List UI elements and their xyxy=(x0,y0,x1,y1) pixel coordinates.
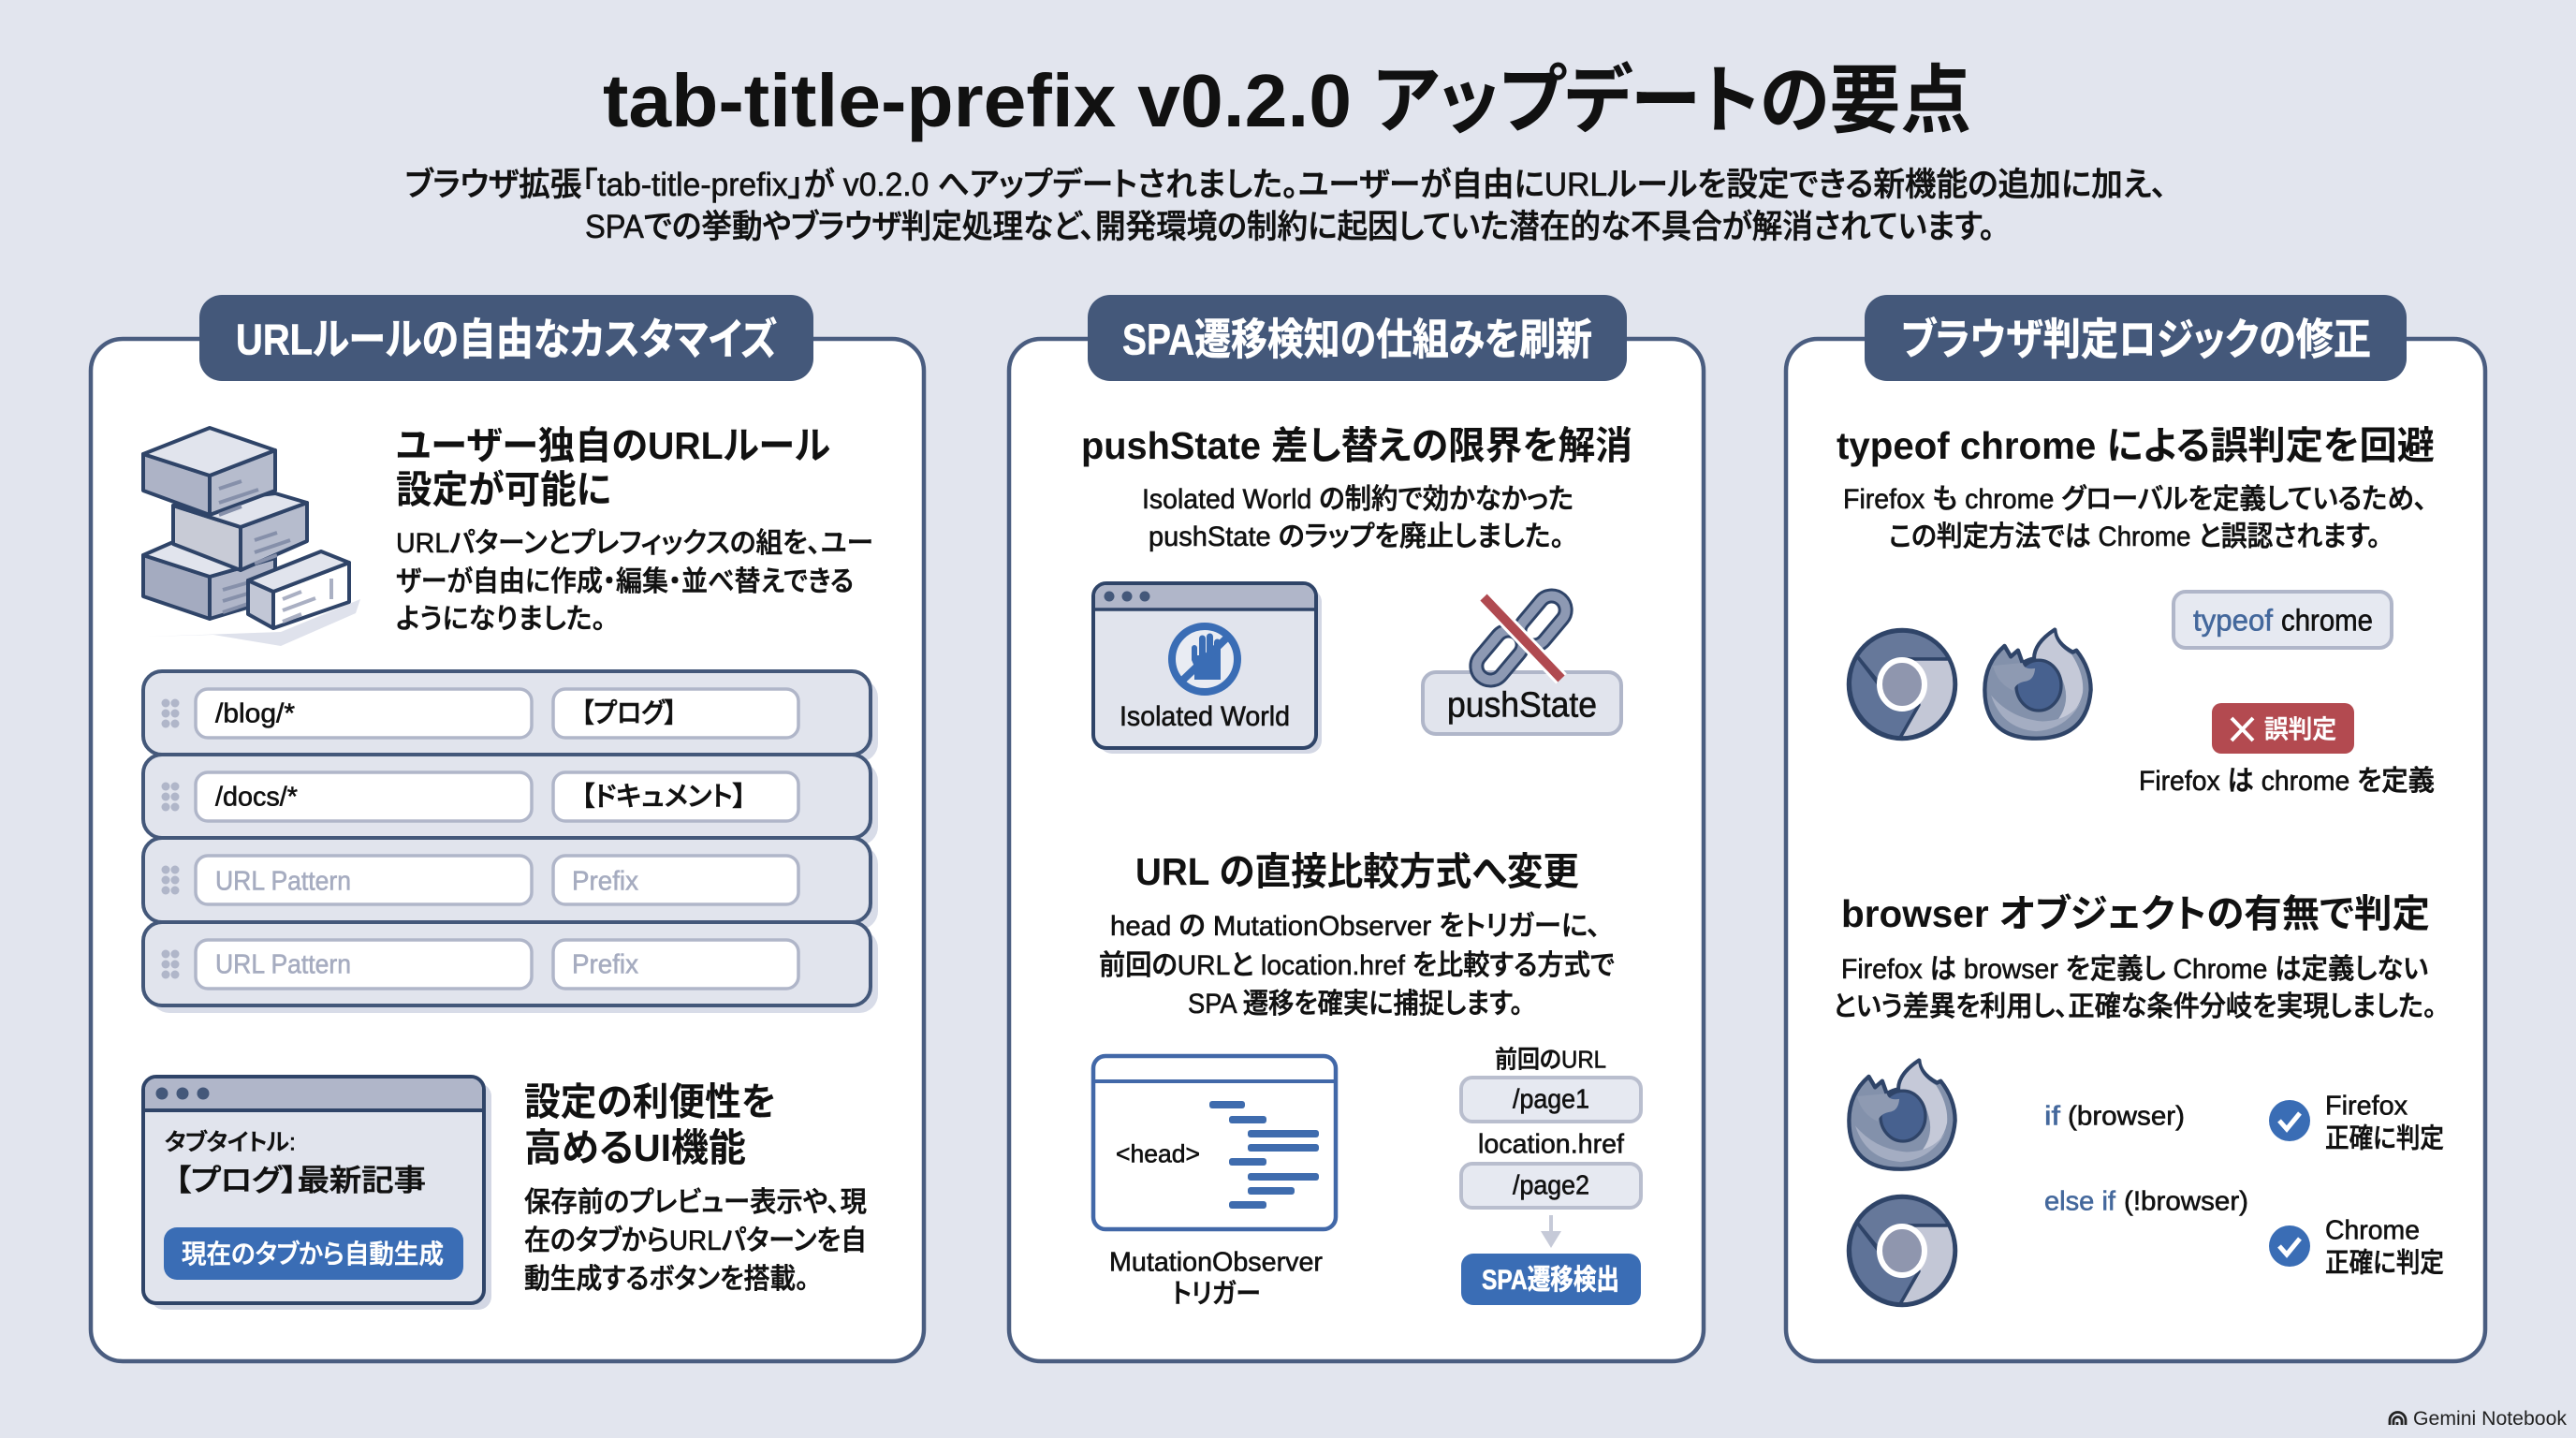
button: SPA遷移検出: SPA遷移検出 xyxy=(1482,1265,1619,1296)
heading: 設定の利便性 xyxy=(524,1080,776,1169)
badge: 誤判定: 誤判定 xyxy=(2264,715,2336,743)
diagram: URL comparison flow: 前回のURL xyxy=(1495,1045,1606,1073)
code: else if (!browser): else if xyxy=(2044,1187,2116,1217)
result: Firefox 正確に判定 xyxy=(2269,1092,2444,1153)
panel frame xyxy=(91,339,924,1361)
heading: typeof chrome: typeof chrome による誤判定を回避 xyxy=(1837,424,2435,467)
rule row 3 xyxy=(143,838,878,930)
code chip: typeof chrome: typeof xyxy=(2193,603,2273,637)
subtitle: ブラウザ拡張「tab-title-prefix」が v0.2.0 へアップデートされました。ユーザーが自由にURLルールを設定できる新機能の追加に加え、 xyxy=(405,167,2167,203)
body text: Firefox も chrome xyxy=(1843,484,2427,552)
body text: URLパターン: URLパターンとプレフィックスの組を、ユー xyxy=(396,528,873,559)
icon: pushState broken chain xyxy=(1423,590,1621,734)
body text: Firefox は browser: という差異を利用し、正確な条件分岐を実現しました。 xyxy=(1833,991,2437,1022)
heading: 設定の利便性: 設定の利便性を xyxy=(524,1080,776,1123)
watermark: Gemini Notebook: Gemini Notebook xyxy=(2413,1408,2568,1430)
icon: Isolated World window: Isolated World xyxy=(1120,701,1290,732)
rule row 3: URL Pattern xyxy=(215,867,351,897)
rule row 1 xyxy=(143,671,878,762)
result: Firefox 正確に判定: Firefox xyxy=(2325,1092,2408,1122)
heading: URL の直接比較方式へ変更: URL の直接比較方式へ変更 xyxy=(1135,850,1579,893)
heading: ユーザー独自のURLルール設定: ユーザー独自のURLルール xyxy=(396,424,830,467)
panel: URLルールの自由なカスタマイズ xyxy=(91,295,924,1361)
body text: Firefox は browser: Firefox は browser を定義し Chrome は定義しない xyxy=(1841,954,2428,985)
code: else if (!browser) xyxy=(2044,1187,2248,1217)
diagram: URL comparison flow: location.href xyxy=(1478,1129,1625,1159)
panel: ブラウザ判定ロジックの修正 xyxy=(1786,295,2485,1361)
body text: Isolated World: Isolated World の制約で効かなかった xyxy=(1142,484,1573,515)
panel header xyxy=(1088,295,1627,381)
subtitle: SPAでの挙動やブラウザ判定処理など、開発環境の制約に起因していた潜在的な不具合が解消されています。 xyxy=(585,209,1995,245)
body text: Isolated World: pushState のラップを廃止しました。 xyxy=(1149,521,1564,552)
diagram: MutationObserver head window: <head> xyxy=(1116,1140,1200,1168)
rule row 4 xyxy=(143,922,878,1013)
title: tab-title-prefix v0.2.0 xyxy=(603,59,1352,142)
icon: pushState broken chain: pushState xyxy=(1447,685,1597,725)
diagram: MutationObserver head window xyxy=(1093,1056,1336,1229)
panel: SPA遷移検知の仕組みを刷新 xyxy=(1009,295,1704,1361)
body text: Isolated World xyxy=(1142,484,1573,552)
body text: Firefox も chrome: Firefox も chrome グローバルを定義しているため、 xyxy=(1843,484,2427,515)
body text: MutationObserver: head の MutationObserver をトリガーに、 xyxy=(1110,911,1601,942)
code: if (browser): (browser) xyxy=(2068,1101,2185,1131)
body text: プレビュー表示 xyxy=(524,1187,867,1295)
code chip: typeof chrome xyxy=(2174,592,2392,648)
rule row 1: /blog/* xyxy=(215,698,295,728)
body text: MutationObserver: 前回のURLと location.href を比較する方式で xyxy=(1099,950,1615,981)
code: else if (!browser): (!browser) xyxy=(2124,1187,2248,1217)
title: アップデートの要点 xyxy=(1373,59,1971,142)
browser preview window: タブタイトル: xyxy=(165,1129,296,1155)
code: if (browser): if xyxy=(2044,1101,2061,1131)
caption: MutationObserver トリガー xyxy=(1109,1247,1323,1309)
subtitle xyxy=(405,167,2167,245)
diagram: URL comparison flow xyxy=(1461,1045,1641,1305)
caption: MutationObserver トリガー: MutationObserver xyxy=(1109,1247,1323,1277)
badge: 誤判定 xyxy=(2212,703,2354,754)
panel header xyxy=(1865,295,2407,381)
result: Chrome 正確に判定: 正確に判定 xyxy=(2325,1247,2444,1279)
button: SPA遷移検出 xyxy=(1461,1254,1641,1305)
rule row 2: 【ドキュメント】 xyxy=(581,783,746,813)
arrow: down xyxy=(1541,1215,1561,1248)
body text: プレビュー表示: 在のタブからURLパターンを自 xyxy=(524,1225,867,1256)
body text: URLパターン xyxy=(396,528,873,635)
icon: Isolated World window xyxy=(1093,583,1322,754)
rule row 1: 【プログ】 xyxy=(581,698,677,728)
body text: URLパターン: ようになりました。 xyxy=(396,604,606,635)
icon: stacked boxes xyxy=(143,428,360,646)
panel header: URLルールの自由なカスタマイズ xyxy=(236,315,777,363)
rule row 2 xyxy=(143,755,878,845)
icon: Firefox xyxy=(1984,630,2091,739)
rule row 2: /docs/* xyxy=(215,783,298,813)
caption: Firefox は chrome を定義: Firefox は chrome を定義 xyxy=(2139,766,2435,797)
body text: Firefox も chrome: この判定方法では Chrome と誤認されます。 xyxy=(1889,521,2380,552)
rule row 3: Prefix xyxy=(572,867,638,897)
caption: MutationObserver トリガー: トリガー xyxy=(1172,1279,1261,1309)
browser preview window: 【プログ】最新記事 xyxy=(175,1163,426,1196)
body text: プレビュー表示: 動生成するボタンを搭載。 xyxy=(524,1264,809,1295)
diagram: URL comparison flow: /page2 xyxy=(1513,1170,1589,1200)
code chip: typeof chrome: chrome xyxy=(2281,603,2373,637)
icon: blocked hand xyxy=(1172,626,1237,692)
icon: Firefox xyxy=(1849,1061,1955,1169)
body text: MutationObserver: SPA 遷移を確実に捕捉します。 xyxy=(1188,989,1523,1020)
body text: URLパターン: ザーが自由に作成・編集・並べ替えできる xyxy=(396,566,854,597)
panel header xyxy=(199,295,813,381)
diagram: URL comparison flow: /page1 xyxy=(1513,1084,1589,1114)
panel header: SPA遷移検知の仕組みを刷新 xyxy=(1122,315,1592,363)
panel frame xyxy=(1009,339,1704,1361)
heading: ユーザー独自のURLルール設定 xyxy=(396,424,830,511)
body text: Firefox は browser xyxy=(1833,954,2437,1022)
icon: Chrome xyxy=(1849,1196,1955,1305)
rule row 4: Prefix xyxy=(572,949,638,979)
result: Firefox 正確に判定: 正確に判定 xyxy=(2325,1123,2444,1153)
result: Chrome 正確に判定: Chrome xyxy=(2325,1215,2420,1245)
icon: Chrome xyxy=(1849,630,1955,739)
heading: ユーザー独自のURLルール設定: 設定が可能に xyxy=(396,468,611,511)
browser preview window: 現在のタブから自動生成 xyxy=(182,1240,444,1269)
body text: MutationObserver xyxy=(1099,911,1615,1020)
browser preview window xyxy=(143,1077,491,1310)
heading: pushState: pushState 差し替えの限界を解消 xyxy=(1081,424,1632,467)
heading: browser: browser オブジェクトの有無で判定 xyxy=(1841,892,2430,935)
body text: プレビュー表示: 保存前のプレビュー表示や、現 xyxy=(524,1187,867,1218)
heading: 設定の利便性: 高めるUI機能 xyxy=(524,1126,746,1169)
panel frame xyxy=(1786,339,2485,1361)
title xyxy=(603,59,1971,142)
panel header: ブラウザ判定ロジックの修正 xyxy=(1901,315,2371,363)
result: Chrome 正確に判定 xyxy=(2269,1215,2444,1279)
rule row 4: URL Pattern xyxy=(215,949,351,979)
